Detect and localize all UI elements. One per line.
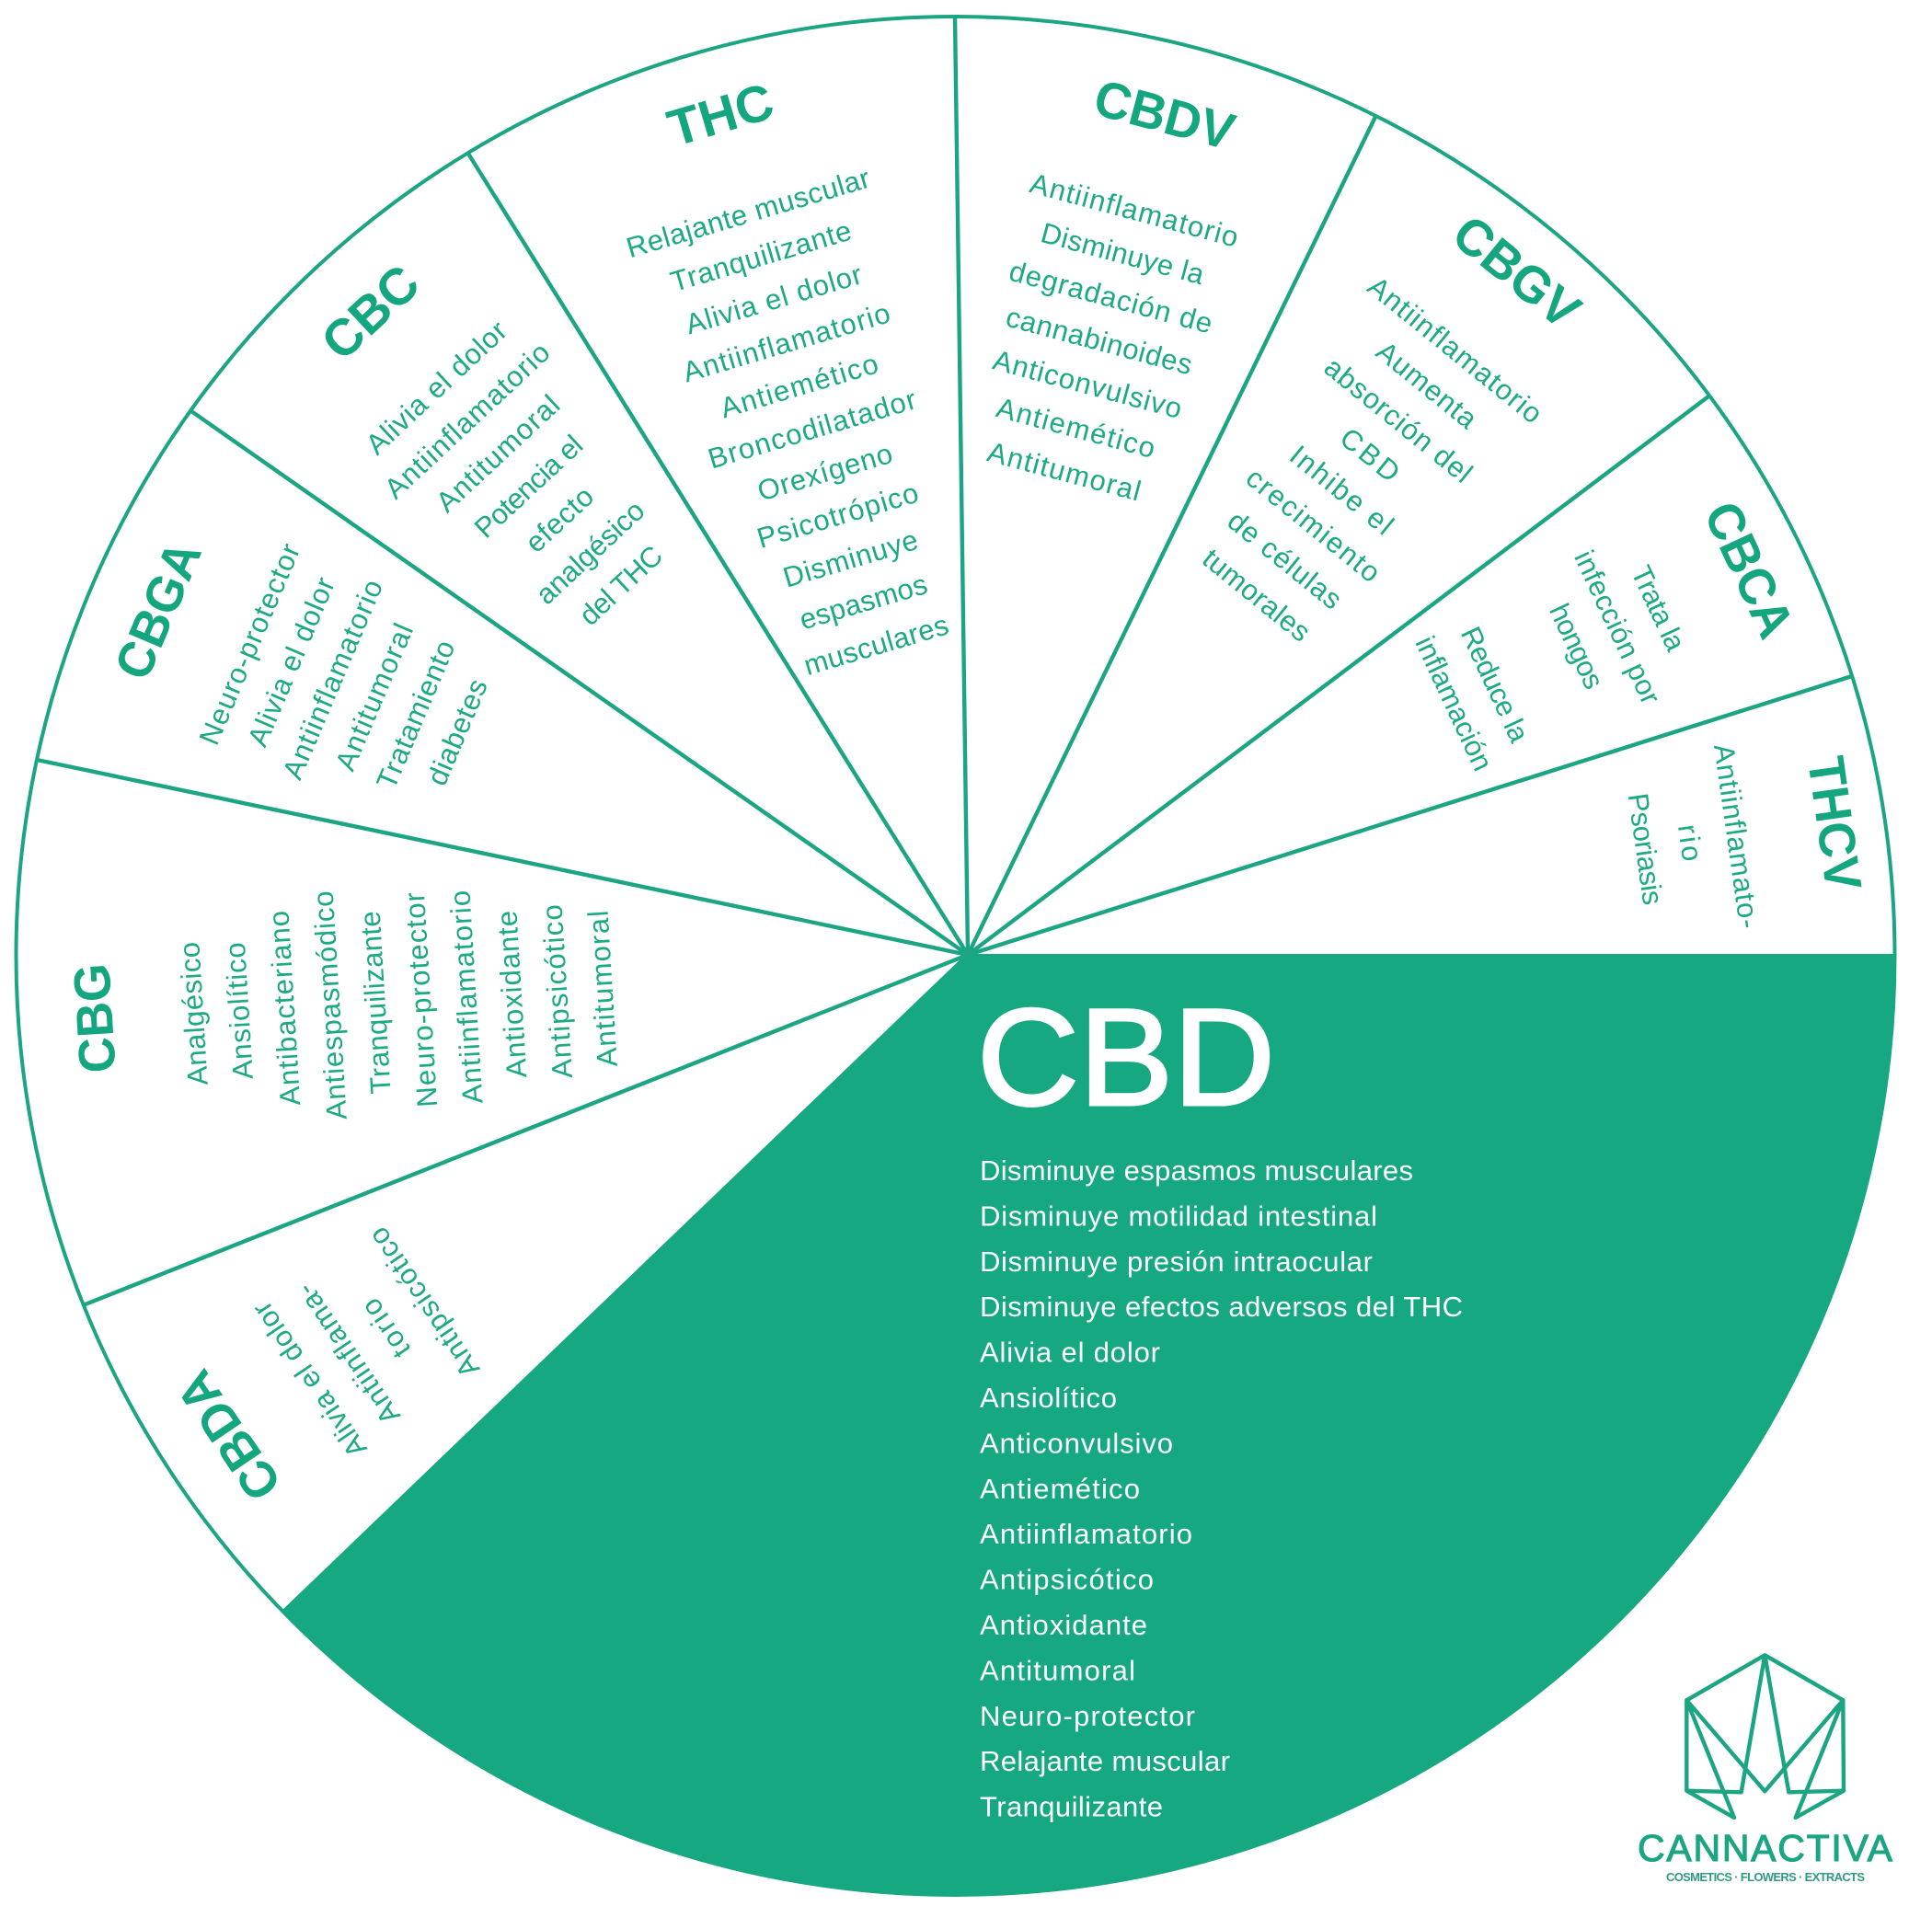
text block: CBCA effects: infección por: [1568, 545, 1667, 709]
logo tagline: COSMETICS · FLOWERS · EXTRACTS: [1666, 1870, 1865, 1884]
text block: THC effects: Psicotrópico: [753, 476, 922, 555]
text block: CBGV effects: absorción del: [1318, 350, 1478, 489]
text block: CBD effects: Tranquilizante: [980, 1791, 1163, 1823]
text block: CBD effects: Disminuye efectos adversos del THC: [980, 1291, 1463, 1323]
text block: CBCA effects: [1405, 526, 1708, 786]
text block: CBG effects: Ansiolítico: [219, 942, 259, 1080]
text block: CBC effects: [348, 303, 710, 670]
panel: CBC: [310, 253, 710, 670]
wedge: CBD filled sector: [282, 954, 1895, 1896]
text block: CBC effects: Antitumoral: [430, 388, 566, 519]
text block: CBGA effects: [193, 539, 514, 837]
text block: CBGA effects: Alivia el dolor: [241, 572, 341, 751]
text block: CBG effects: Antioxidante: [490, 910, 533, 1079]
text block: CBGA effects: Antiinflamatorio: [276, 575, 389, 784]
heading: CBGA: CBGA: [103, 533, 213, 687]
text block: CBCA effects: hongos: [1543, 599, 1610, 694]
text block: CBGV effects: Antiinflamatorio: [1362, 270, 1548, 430]
text block: THC effects: Disminuye: [779, 523, 922, 594]
text block: CBGA effects: Neuro-protector: [193, 539, 306, 750]
text block: CBG effects: [170, 873, 626, 1129]
text block: THC effects: Alivia el dolor: [682, 258, 866, 340]
text block: THC effects: musculares: [800, 609, 952, 682]
text block: CBD effects: Antiemético: [980, 1473, 1140, 1505]
text block: CBDV effects: Antiemético: [993, 391, 1158, 465]
text block: CBGA effects: diabetes: [420, 674, 494, 790]
text block: CBD effects: Neuro-protector: [980, 1700, 1195, 1732]
text block: CBC effects: Alivia el dolor: [360, 315, 513, 461]
text block: CBGV effects: CBD: [1334, 421, 1407, 488]
text block: CBD effects: Disminuye espasmos musculares: [980, 1154, 1413, 1187]
icon: hexagon leaf: [1686, 1655, 1844, 1818]
text block: THC effects: [623, 162, 1002, 696]
text block: THCV effects: Antiinflamato-: [1708, 742, 1765, 931]
text block: CBG effects: Antibacteriano: [262, 910, 306, 1107]
text block: CBD effects: Antiinflamatorio: [980, 1518, 1192, 1550]
text block: THC effects: espasmos: [796, 568, 931, 636]
text block: THC effects: Tranquilizante: [667, 214, 855, 298]
text block: CBDA effects: [246, 1219, 488, 1464]
panel: CBCA: [1405, 493, 1806, 786]
text block: CBC effects: efecto: [519, 480, 600, 559]
text block: THC effects: Orexígeno: [753, 437, 896, 508]
text block: CBD effects: Disminuye presión intraocular: [980, 1246, 1373, 1278]
text block: CBDV effects: Antiinflamatorio: [1027, 166, 1242, 254]
panel: CBD: [977, 980, 1463, 1823]
text block: THCV effects: [1616, 742, 1765, 943]
text block: CBD effects: Alivia el dolor: [980, 1337, 1160, 1369]
text block: CBDV effects: [957, 166, 1242, 515]
heading: THC: THC: [661, 72, 780, 157]
sector spokes: [37, 17, 1852, 1305]
text block: CBGV effects: [1163, 270, 1548, 675]
panel: CBDA: [165, 1219, 488, 1511]
text block: THC effects: Broncodilatador: [705, 383, 920, 475]
logo: Cannactiva: [1638, 1655, 1893, 1884]
heading: THCV: THCV: [1797, 752, 1873, 894]
panel: CBDV: [957, 68, 1242, 515]
text block: CBD effects: Antitumoral: [980, 1654, 1135, 1686]
text block: THCV effects: Psoriasis: [1622, 791, 1669, 907]
heading: CBDA: CBDA: [165, 1361, 293, 1511]
text block: CBGV effects: crecimiento: [1240, 461, 1386, 589]
text block: CBC effects: Antiinflamatorio: [378, 336, 557, 505]
text block: CBDV effects: Anticonvulsivo: [990, 344, 1186, 425]
text block: CBCA effects: Trata la: [1625, 560, 1692, 657]
panel: THC: [623, 72, 1002, 696]
heading: CBCA: CBCA: [1693, 493, 1806, 647]
panel: CBG: [62, 873, 626, 1129]
text block: CBDA effects: torio: [354, 1292, 417, 1364]
text block: CBCA effects: Reduce la: [1455, 622, 1535, 748]
text block: CBC effects: analgésico: [529, 494, 650, 611]
text block: CBG effects: Neuro-protector: [398, 891, 443, 1108]
text block: CBG effects: Antiespasmódico: [307, 890, 353, 1120]
text block: CBDV effects: Antitumoral: [984, 435, 1144, 507]
text block: CBDA effects: Antiinflama-: [289, 1278, 407, 1430]
text block: CBG effects: Antipsicótico: [536, 903, 579, 1079]
text block: CBC effects: del THC: [573, 539, 669, 632]
text block: CBGV effects: Inhibe el: [1283, 439, 1399, 541]
panel: CBGV: [1163, 203, 1592, 675]
text block: THC effects: Relajante muscular: [623, 162, 873, 264]
text block: CBD effects: Antipsicótico: [980, 1564, 1154, 1596]
heading: CBD: CBD: [977, 980, 1275, 1134]
text block: CBD effects: Anticonvulsivo: [980, 1427, 1173, 1459]
text block: CBGV effects: Aumenta: [1370, 335, 1484, 435]
heading: CBDV: CBDV: [1088, 68, 1241, 161]
text block: CBG effects: Tranquilizante: [354, 910, 397, 1095]
logo wordmark: CANNACTIVA: [1638, 1827, 1893, 1869]
text block: CBG effects: Analgésico: [173, 941, 214, 1086]
panel: THCV: [1616, 742, 1873, 943]
text block: CBDA effects: Antipsicótico: [362, 1222, 486, 1384]
text block: CBD effects: [980, 1154, 1463, 1823]
text block: CBDV effects: degradación de: [1006, 255, 1216, 339]
text block: CBG effects: Antiinflamatorio: [443, 890, 489, 1105]
text block: CBG effects: Antitumoral: [582, 910, 624, 1068]
text block: CBC effects: Potencia el: [468, 429, 589, 545]
text block: CBD effects: Ansiolítico: [980, 1382, 1117, 1414]
heading: CBC: CBC: [310, 253, 431, 371]
heading: CBG: CBG: [62, 962, 127, 1074]
text block: THC effects: Antiemético: [717, 347, 882, 424]
text block: CBD effects: Disminuye motilidad intestinal: [980, 1200, 1377, 1232]
text block: CBGV effects: tumorales: [1196, 542, 1317, 649]
text block: THC effects: Antiinflamatorio: [679, 297, 894, 388]
text block: CBDA effects: Alivia el dolor: [246, 1296, 374, 1464]
heading: CBGV: CBGV: [1442, 203, 1592, 340]
text block: CBD effects: Relajante muscular: [980, 1745, 1230, 1777]
text block: CBGA effects: Antitumoral: [328, 619, 420, 775]
text block: CBDV effects: Disminuye la: [1038, 216, 1208, 291]
text block: CBGA effects: Tratamiento: [370, 636, 462, 794]
text block: CBD effects: Antioxidante: [980, 1609, 1147, 1641]
text block: CBCA effects: inflamación: [1409, 631, 1500, 775]
panel: CBGA: [103, 533, 514, 837]
text block: CBDV effects: cannabinoides: [1003, 301, 1196, 381]
text block: THCV effects: rio: [1672, 822, 1708, 863]
text block: CBGV effects: de células: [1222, 504, 1349, 615]
